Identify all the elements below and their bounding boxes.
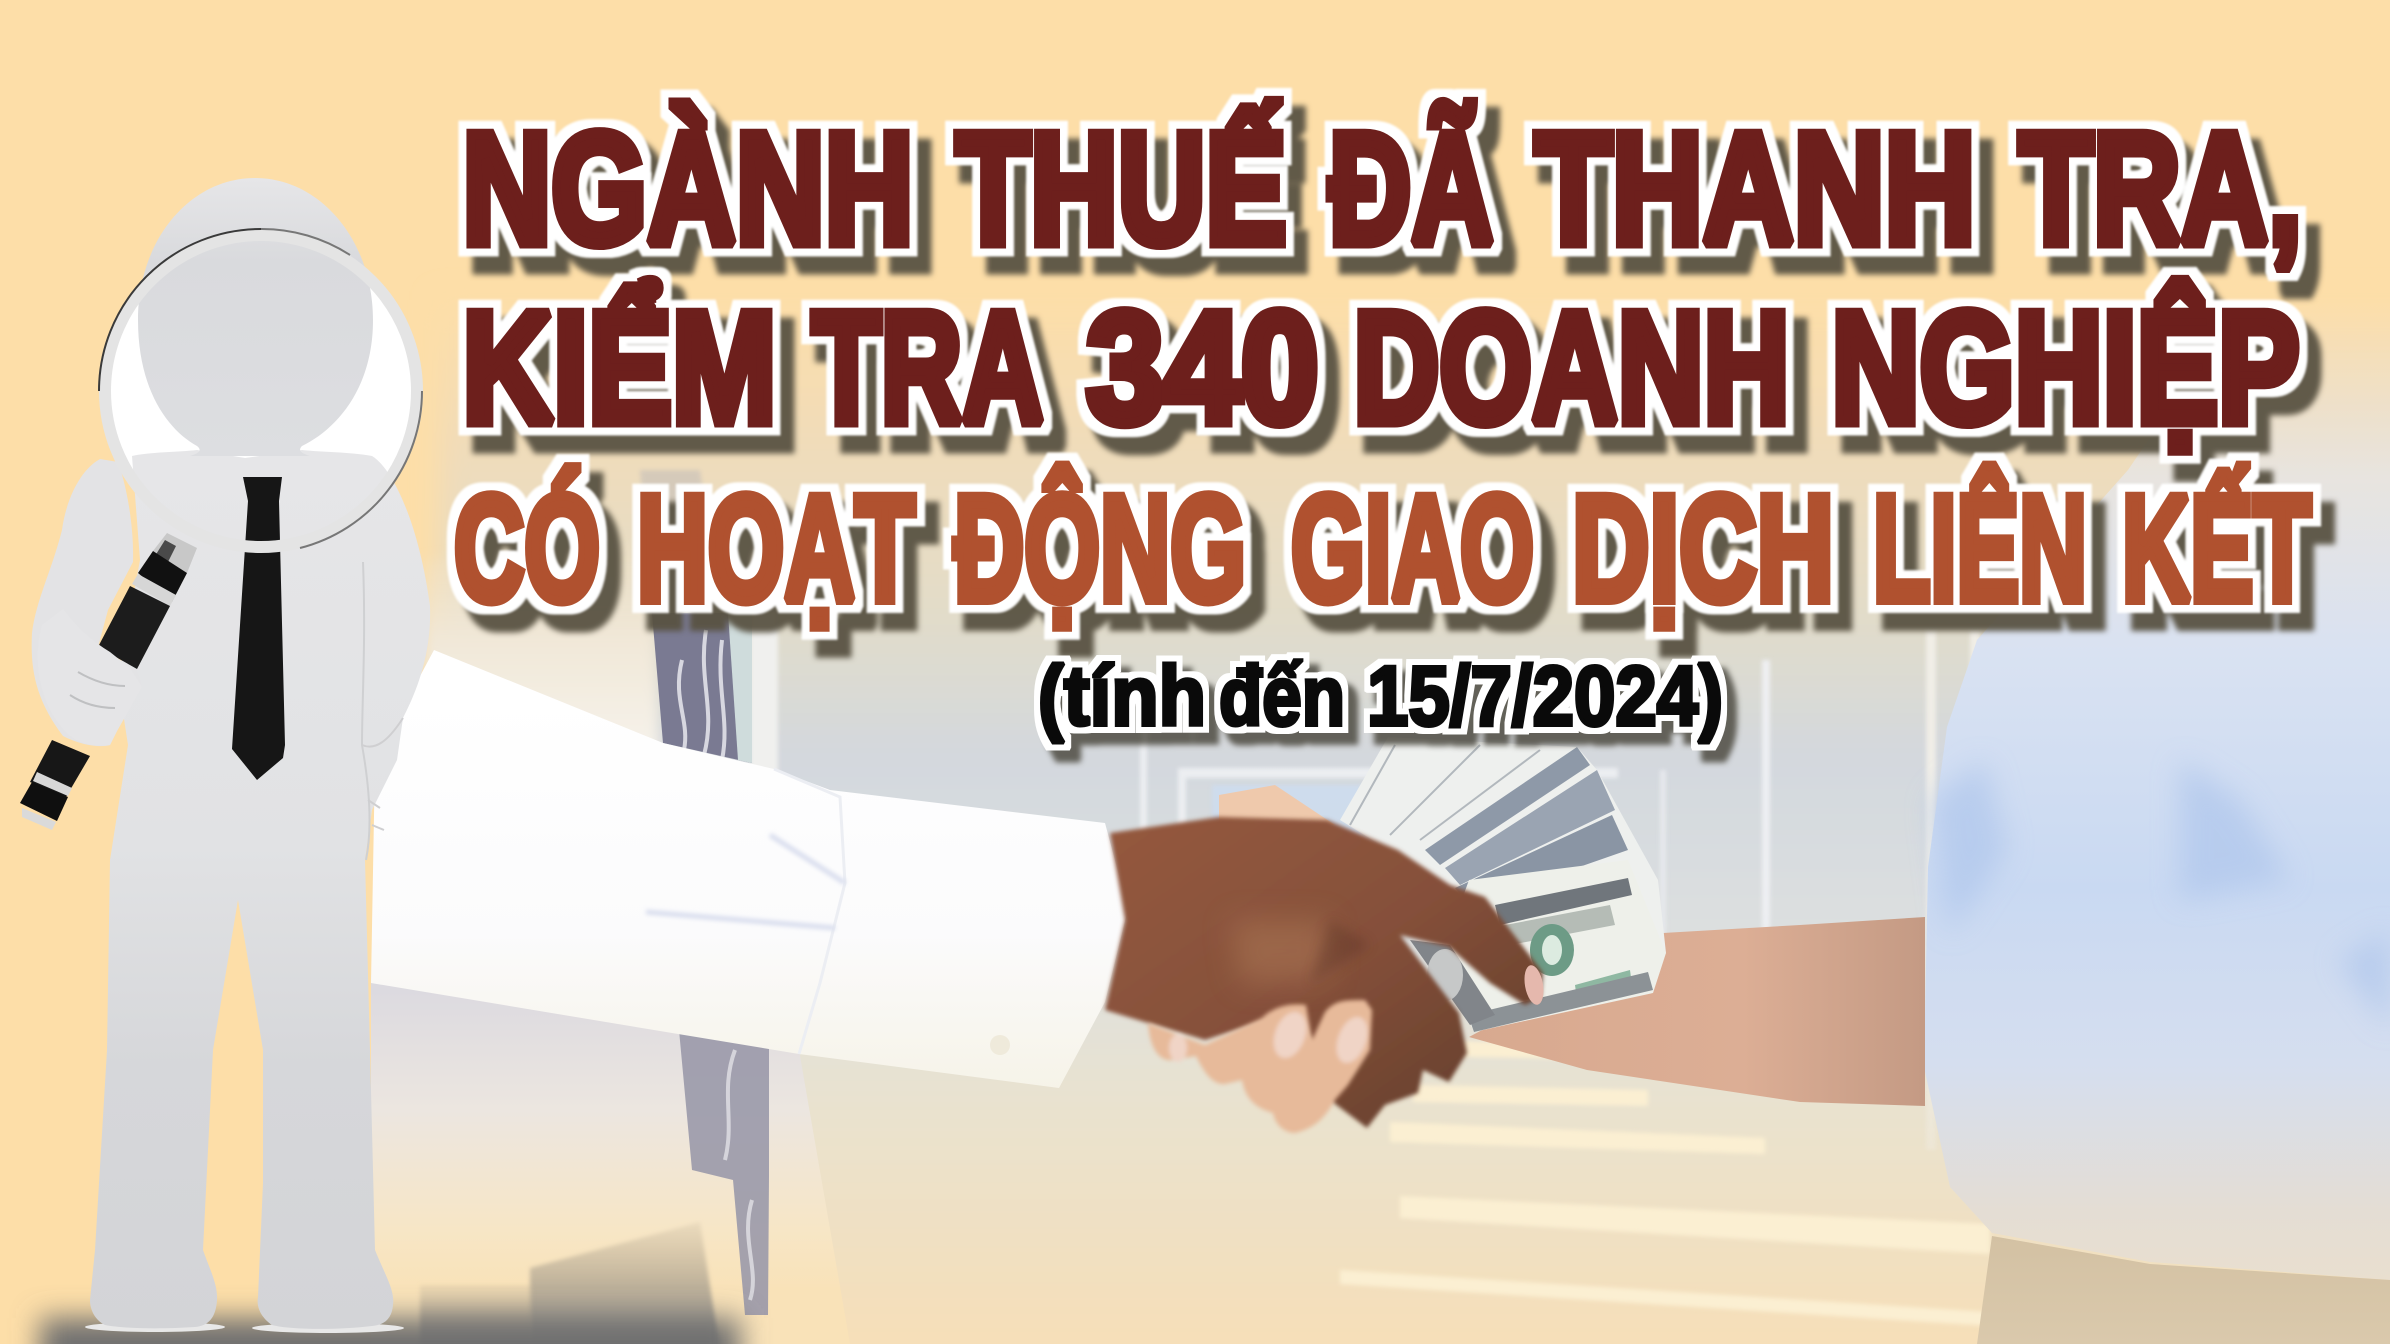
subtitle date: (tính (1038, 649, 1206, 743)
title line 1: NGÀNH (462, 101, 914, 277)
right person: blue shirt, trousers (1924, 170, 2390, 1344)
tie upper (640, 470, 752, 763)
title line 3: HOẠT (637, 464, 915, 632)
title line 2: TRA (812, 280, 1044, 456)
magnifier lens (101, 232, 421, 550)
tie lower (679, 1030, 769, 1315)
title line 1 (462, 101, 2302, 277)
upper finger of light hand (1219, 785, 1335, 825)
floor shadow band (40, 1318, 740, 1344)
title line 2 (462, 280, 2300, 456)
light hand: fingers (1148, 1000, 1373, 1133)
subtitle date: đến (1219, 649, 1345, 743)
foot plates (85, 1322, 225, 1332)
subtitle date (1038, 649, 1723, 743)
left businessman shirt and tie (371, 470, 1128, 1344)
belt (530, 1222, 720, 1344)
shirt body below sleeve (371, 975, 850, 1344)
dark hand (1105, 817, 1543, 1128)
title line 3: DỊCH (1572, 464, 1834, 632)
left arm and hand (32, 459, 142, 746)
title line 3: GIAO (1291, 464, 1534, 632)
arm (1469, 917, 1925, 1106)
right hand outline (362, 718, 403, 830)
stairs (1340, 1040, 1990, 1326)
figure: 3D man with magnifying glass (20, 178, 430, 1333)
arm crease right (362, 562, 369, 860)
title line 2: DOANH (1354, 280, 1790, 456)
banknote fan (1340, 737, 1666, 1032)
magnifier ring (105, 235, 417, 547)
portrait (1410, 940, 1495, 1025)
sleeve (371, 650, 1128, 1088)
subtitle date: 15/7/2024) (1367, 649, 1723, 743)
torso and legs (90, 450, 430, 1329)
fingers over handle (38, 609, 142, 746)
title line 1: THUẾ (956, 101, 1286, 277)
main banknote (1440, 860, 1666, 1032)
shirt chest (425, 540, 660, 770)
tie (232, 477, 285, 780)
title line 1: TRA, (2019, 101, 2302, 277)
title line 3: LIÊN (1873, 464, 2087, 632)
title line 1: ĐÃ (1329, 101, 1494, 277)
title line 2: 340 (1086, 280, 1318, 456)
head (138, 178, 373, 456)
title line 3 (454, 464, 2311, 632)
title line 2: KIỂM (462, 280, 776, 456)
photo background: corridor (440, 300, 2390, 1344)
trousers (1977, 1236, 2390, 1344)
title line 3: ĐỘNG (954, 464, 1246, 632)
title line 1: THANH (1535, 101, 1976, 277)
arm with banknotes (1105, 737, 1925, 1133)
magnifier handle (20, 533, 197, 830)
title (454, 101, 2311, 632)
title line 3: CÓ (454, 464, 600, 632)
